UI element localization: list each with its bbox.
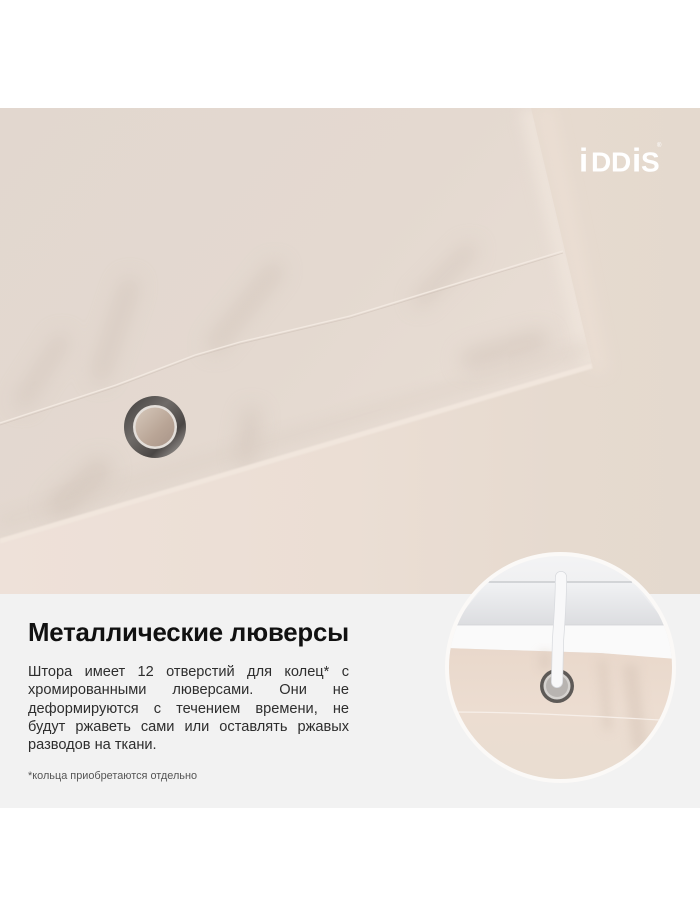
front fabric layer with hem [0,108,592,541]
text block: description: будут ржаветь сами или оставлять ржавых [28,719,349,735]
text block: description: разводов на ткани. [28,737,157,753]
light selvedge along right edge [530,118,546,182]
inset: ring on curtain rail [445,552,676,783]
logo: iddis: i [579,142,588,178]
logo: iddis: i [632,142,641,178]
text block: description: деформируются с течением времени, не [28,701,349,717]
logo: iddis: ® [657,142,662,149]
wall [468,560,656,611]
photo: curtain fabric with grommet [0,108,700,594]
heading: Металлические люверсы [28,619,349,647]
rail [451,626,672,658]
shadow folds [22,250,540,505]
text block: description: Штора имеет 12 отверстий для колец* с [28,664,349,680]
curtain folds [545,652,640,750]
eyelet [540,669,574,703]
shadow above bottom edge [0,347,592,522]
hem stitching [0,251,563,423]
footnote: *кольца приобретаются отдельно [28,770,197,782]
logo: iddis [579,142,662,178]
curtain [444,648,677,784]
panel: text background [0,594,700,808]
text block: description: хромированными люверсами. Они не [28,682,349,698]
ring hook [557,577,561,682]
logo: iddis: D [591,146,611,178]
text block: description [28,664,349,753]
back fabric layer [0,108,700,594]
shelf [458,607,664,624]
hem stitch [455,712,660,720]
logo: iddis: S [641,146,660,178]
bottom edge highlight [0,366,592,541]
grommet [124,396,186,458]
logo: iddis: D [611,146,631,178]
peach glow beside the hem [545,108,600,372]
